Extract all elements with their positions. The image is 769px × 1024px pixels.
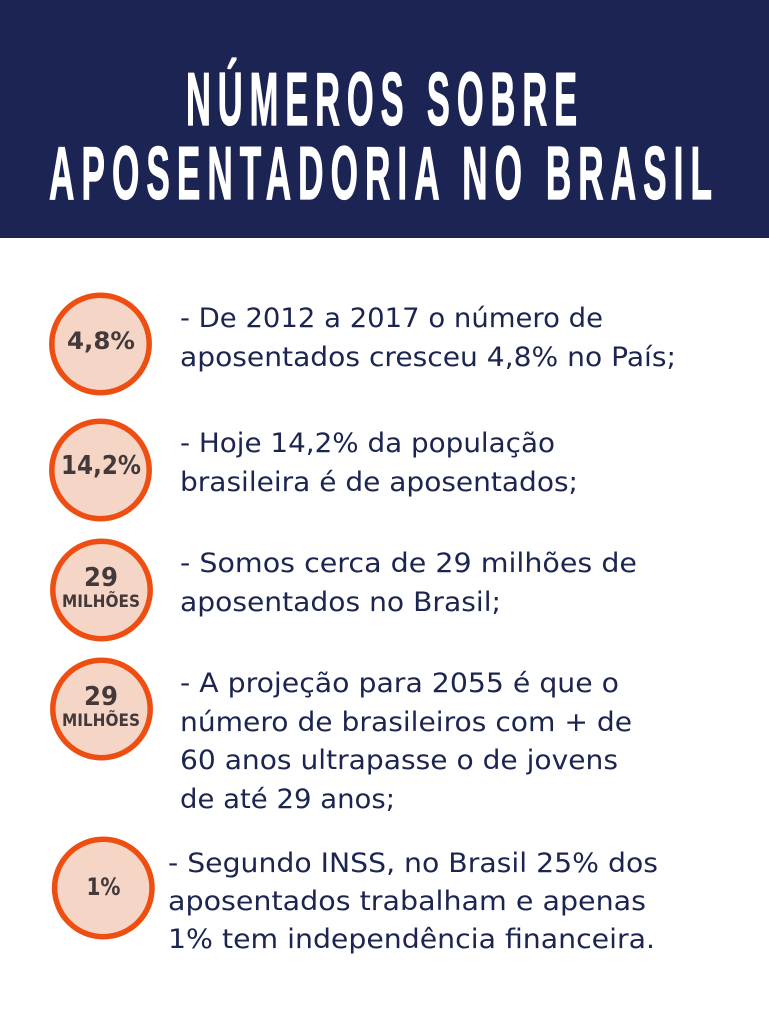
item 1 [52, 295, 676, 393]
badge: 29 milhões: MILHÕES [62, 589, 140, 612]
text: item 4 [180, 668, 632, 815]
item 3 [53, 541, 637, 639]
badge: 4,8% [52, 295, 149, 393]
item 5 [55, 839, 658, 955]
badge: 1%: 1% [86, 873, 120, 901]
text: item 4: 60 anos ultrapasse o de jovens [180, 745, 618, 776]
text: item 5: 1% tem independência financeira. [168, 924, 655, 955]
text: item 3 [180, 548, 637, 618]
badge: 4,8%: 4,8% [67, 327, 135, 355]
text: item 2 [180, 428, 578, 498]
text: item 5: - Segundo INSS, no Brasil 25% dos [168, 848, 658, 879]
text: item 2: brasileira é de aposentados; [180, 467, 578, 498]
text: item 3: - Somos cerca de 29 milhões de [180, 548, 637, 579]
header banner [0, 0, 769, 238]
text: item 3: aposentados no Brasil; [180, 587, 501, 618]
text: item 1 [180, 303, 676, 373]
badge: 29 milhões [53, 541, 150, 639]
badge: 29 milhões [53, 660, 150, 758]
text: item 2: - Hoje 14,2% da população [180, 428, 555, 459]
badge: 14,2%: 14,2% [61, 451, 141, 481]
badge: 29 milhões: 29 [84, 563, 118, 593]
text: item 1: - De 2012 a 2017 o número de [180, 303, 603, 334]
text: item 4: - A projeção para 2055 é que o [180, 668, 619, 699]
badge: 14,2% [52, 421, 149, 519]
badge: 29 milhões: MILHÕES [62, 708, 140, 731]
item 2 [52, 421, 578, 519]
item 4 [53, 660, 632, 815]
badge: 29 milhões: 29 [84, 682, 118, 712]
text: item 4: de até 29 anos; [180, 784, 395, 815]
text: item 5: aposentados trabalham e apenas [168, 886, 646, 917]
text: item 5 [168, 848, 658, 955]
badge: 1% [55, 839, 152, 937]
text: item 4: número de brasileiros com + de [180, 707, 632, 738]
title [49, 57, 719, 215]
text: item 1: aposentados cresceu 4,8% no País; [180, 342, 676, 373]
